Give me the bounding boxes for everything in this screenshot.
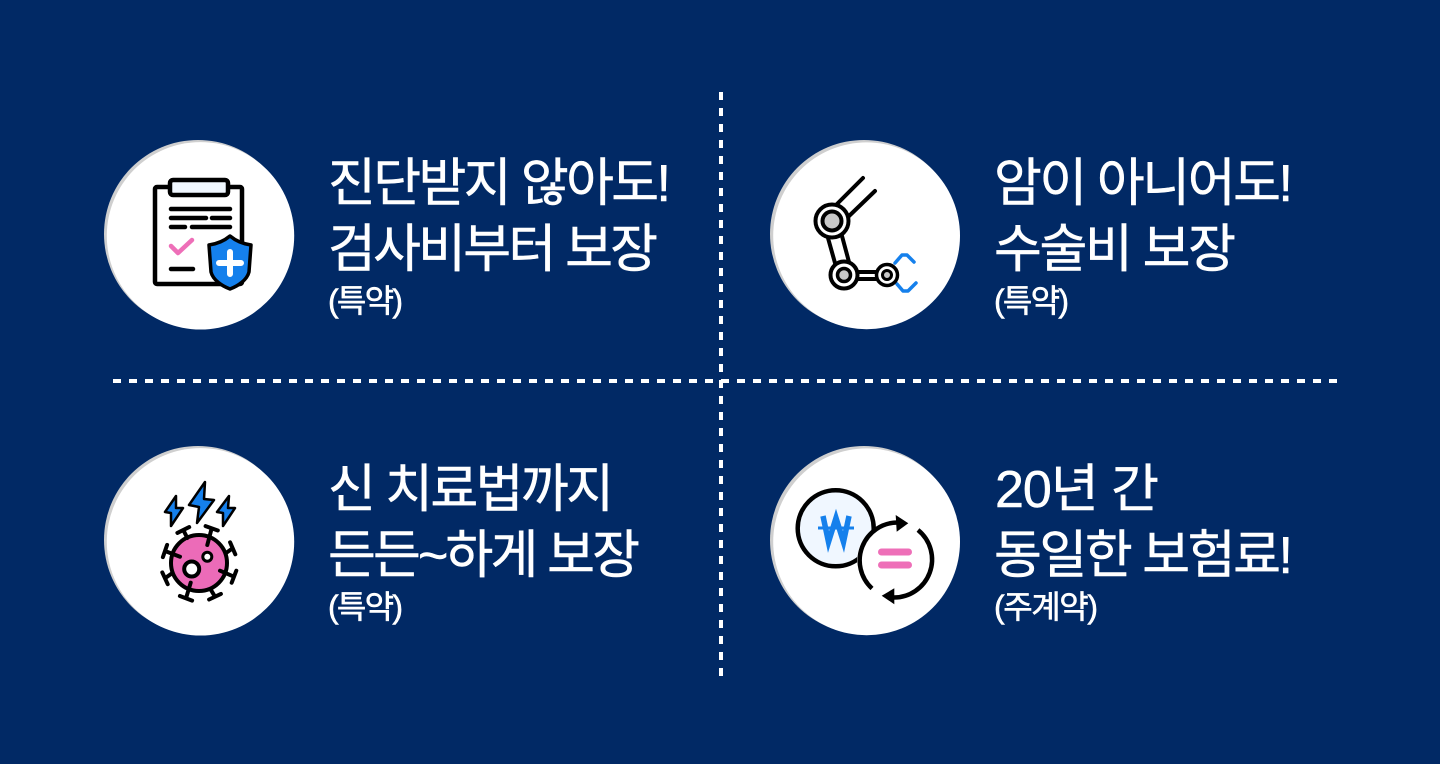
text: fixed premium headline: 동일한 보험료!	[994, 527, 1293, 585]
panel: diagnosis test coverage	[104, 140, 671, 330]
icon: won coin and renewal arrows	[770, 446, 960, 635]
icon: clipboard with shield	[104, 140, 294, 330]
text: fixed premium headline	[994, 461, 1293, 625]
text: new treatment headline: 신 치료법까지	[328, 461, 614, 519]
text: surgery headline: 수술비 보장	[994, 221, 1236, 279]
icon: robot arm	[770, 140, 960, 329]
panel: surgery coverage	[770, 140, 1293, 329]
text: surgery headline: 암이 아니어도!	[994, 155, 1293, 213]
text: diagnosis headline: 검사비부터 보장	[328, 221, 658, 279]
text: surgery headline	[994, 155, 1293, 319]
panel: new treatment coverage	[104, 446, 640, 636]
text: new treatment headline: (특약)	[328, 589, 403, 625]
text: new treatment headline: 든든~하게 보장	[328, 527, 640, 585]
text: diagnosis headline: 진단받지 않아도!	[328, 155, 671, 213]
text: new treatment headline	[328, 461, 640, 625]
text: fixed premium headline: 20년 간	[995, 461, 1159, 519]
text: surgery headline: (특약)	[994, 283, 1069, 319]
text: diagnosis headline	[328, 155, 671, 319]
icon: virus with lightning	[104, 446, 294, 636]
panel: fixed premium	[770, 446, 1293, 635]
text: fixed premium headline: (주계약)	[994, 589, 1098, 625]
text: diagnosis headline: (특약)	[328, 283, 403, 319]
